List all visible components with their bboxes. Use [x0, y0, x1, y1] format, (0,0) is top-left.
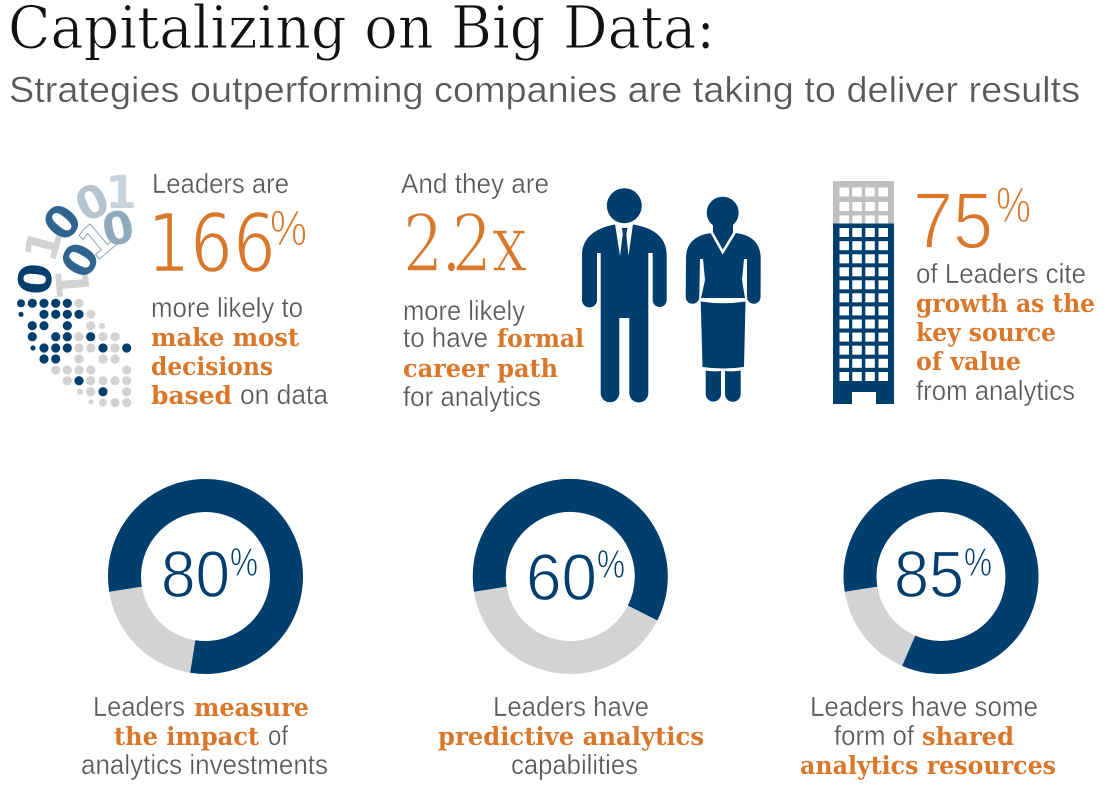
binary digits: 1	[105, 166, 137, 219]
caption: leaders measure the impact: of	[268, 720, 288, 751]
panel: 60% predictive analytics	[438, 495, 704, 780]
text: more likely to make most decisions based on data	[151, 292, 328, 410]
binary digits: 0	[32, 193, 93, 251]
caption: leaders have predictive analytics capabilities: capabilities	[511, 749, 638, 780]
panel: 85% shared resources	[800, 496, 1056, 780]
donut chart: 60%: 60	[526, 540, 597, 614]
caption: leaders have predictive analytics capabilities: predictive analytics	[438, 722, 704, 751]
text: more likely to have formal career path for analytics: to have	[403, 322, 488, 353]
panel: 80% measure impact	[81, 496, 328, 780]
donut chart: 85%: %	[964, 541, 992, 585]
stat: 166%: 166	[147, 197, 276, 292]
caption: leaders measure the impact: measure	[194, 693, 309, 722]
caption: leaders measure the impact: the impact	[114, 722, 259, 751]
text: more likely to make most decisions based on data: on data	[240, 379, 328, 410]
text: of leaders cite growth as the key source of value from analytics: of value	[916, 347, 1021, 376]
text: more likely to make most decisions based on data: make most	[151, 323, 299, 352]
stat: 75%: 75	[913, 176, 993, 265]
panel: 75% growth	[833, 176, 1095, 406]
caption: leaders have some form of shared analytics resources: shared	[922, 722, 1014, 751]
binary digits: 1	[68, 210, 126, 271]
caption: leaders have some form of shared analytics resources: Leaders have some	[810, 691, 1038, 722]
binary digits: 0	[50, 233, 111, 287]
binary digits: 1	[14, 223, 73, 267]
icon: office building	[833, 181, 894, 404]
binary digits: 0	[8, 261, 63, 297]
caption: leaders measure the impact: Leaders	[93, 691, 185, 722]
icon: businesswoman	[686, 197, 761, 402]
binary digits: 1	[44, 265, 99, 301]
text: more likely to have formal career path for analytics: more likely	[403, 295, 525, 326]
text: and they are: And they are	[401, 168, 549, 199]
caption: leaders have some form of shared analytics resources: form of	[834, 720, 914, 751]
text: more likely to have formal career path for analytics: career path	[403, 354, 558, 383]
text: more likely to make most decisions based on data: decisions	[151, 352, 273, 381]
subtitle: Strategies outperforming companies are taking to deliver results	[9, 69, 1080, 110]
text: more likely to make most decisions based on data: based	[151, 381, 232, 410]
donut chart: 60%	[489, 495, 651, 658]
binary digits: 0	[97, 199, 139, 258]
binary digits: 0	[67, 172, 118, 233]
navy dots	[17, 299, 131, 396]
donut chart: 80%: %	[230, 541, 258, 585]
text: more likely to have formal career path for analytics: formal	[497, 324, 584, 353]
binary digits	[8, 166, 139, 301]
stat: 2.2x: 2.2x	[403, 198, 527, 290]
donut chart: 60%: %	[597, 543, 625, 587]
stat: 75%: %	[996, 177, 1031, 233]
panel: 166% decisions	[8, 166, 328, 410]
donut chart: 80%	[124, 496, 286, 658]
text: of leaders cite growth as the key source of value from analytics: from analytics	[916, 375, 1075, 406]
donut chart: 85%	[860, 496, 1022, 658]
caption: leaders have predictive analytics capabilities: Leaders have	[493, 691, 649, 722]
text: of leaders cite growth as the key source of value from analytics: of Leaders cite	[916, 258, 1086, 289]
text: more likely to make most decisions based on data: more likely to	[151, 292, 303, 323]
caption: leaders have some form of shared analytics resources: analytics resources	[800, 751, 1056, 780]
donut chart: 85%: 85	[894, 537, 964, 611]
text: more likely to have formal career path for analytics	[403, 295, 584, 412]
text: of leaders cite growth as the key source of value from analytics: growth as the	[916, 289, 1095, 318]
caption: leaders measure the impact: analytics investments	[81, 749, 328, 780]
icon: businessman	[582, 188, 667, 402]
icon: binary data digits and dots	[8, 166, 139, 407]
caption: leaders measure the impact	[81, 691, 328, 780]
text: of leaders cite growth as the key source of value from analytics	[916, 258, 1095, 406]
panel: 2.2x career path	[401, 168, 761, 412]
grey dots	[51, 299, 131, 407]
text: more likely to have formal career path for analytics: for analytics	[403, 381, 541, 412]
caption: leaders have predictive analytics capabilities	[438, 691, 704, 780]
text: leaders are: Leaders are	[152, 168, 289, 199]
donut chart: 80%: 80	[161, 537, 230, 611]
caption: leaders have some form of shared analytics resources	[800, 691, 1056, 780]
text: of leaders cite growth as the key source of value from analytics: key source	[916, 318, 1056, 347]
stat: 166%: %	[270, 200, 307, 256]
